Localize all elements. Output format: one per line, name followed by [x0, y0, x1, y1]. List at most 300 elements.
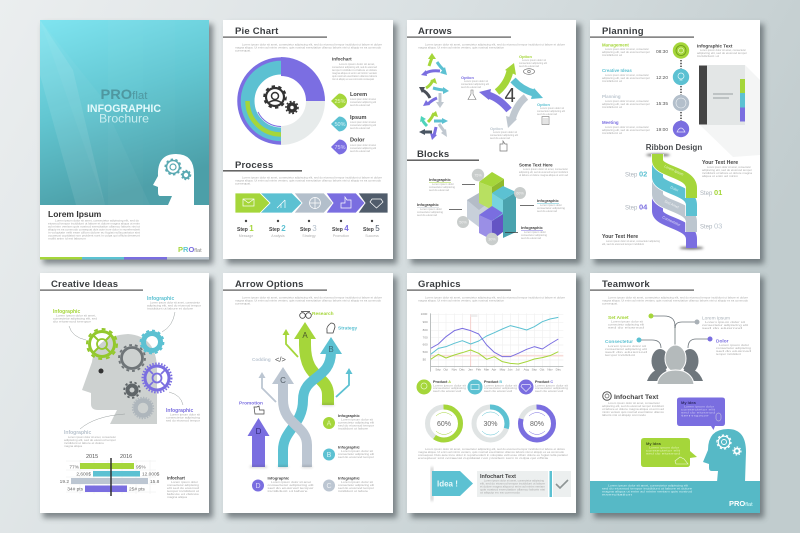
- legend: D: Lorem ipsum dolor sit amet: [271, 480, 311, 484]
- line chart: Sep: [532, 367, 537, 371]
- text block: Lorem ipsum dolor sit amet, consectetur: [608, 401, 660, 405]
- callout: purple Infographic: consectetur adipiscing: [166, 416, 201, 420]
- cover title: INFOGRAPHIC: [87, 103, 161, 115]
- legend: C: Infographic: [338, 476, 361, 480]
- text block: Lorem ipsum dolor sit amet, consectetur adipiscing elit, sed do eiusmod tempor incididunt ut labore et dolore: [425, 447, 565, 451]
- callout: teal Infographic: Lorem ipsum dolor sit amet, consectetur: [150, 300, 200, 304]
- block labels: Lorem ipsum dolor sit amet, consectetur: [523, 167, 568, 171]
- light rays: [40, 20, 175, 205]
- option: left: Lorem ipsum dolor sit: [464, 79, 488, 83]
- legend: 25% Lorem: Lorem ipsum dolor sit amet: [350, 97, 376, 101]
- label: Consectetur: Lorem ipsum dolor sit: [608, 344, 646, 348]
- legend: B: [323, 444, 374, 460]
- line chart: Aug: [524, 367, 529, 371]
- callout: Infographic Text: Infographic Text: [697, 44, 733, 48]
- callout: Infochart: quis nostrud exercitation ullamco laboris: [332, 74, 378, 78]
- label: Consectetur: Consectetur: [605, 339, 633, 345]
- donut 60%: [428, 407, 460, 440]
- product legend B: Product B: [484, 380, 502, 384]
- callout: Infochart Text box: [477, 471, 548, 497]
- label: Lorem Ipsum: [702, 316, 748, 330]
- heading: Process: Process: [235, 160, 273, 171]
- team silhouette: [647, 345, 703, 384]
- schedule rows: Planning: [602, 94, 621, 99]
- block labels: Lorem ipsum dolor: [524, 230, 546, 234]
- product legend C: sed do eiusmod: [535, 389, 564, 393]
- callout: purple Infographic: Infographic: [166, 408, 193, 414]
- line chart: Jul: [516, 367, 520, 371]
- block labels: sed do eiusmod: [417, 213, 437, 217]
- text block: aliquip ex ea commodo consequat duis aute irure dolor in reprehenderit: [48, 228, 140, 232]
- schedule rows: incididunt ut: [602, 79, 622, 83]
- text block: magna aliqua. Ut enim ad minim veniam, quis nostrud exercitation: [418, 298, 504, 302]
- value badges: 60%: [516, 192, 524, 196]
- label: Dolor: Lorem ipsum dolor: [719, 343, 749, 347]
- footer text: [602, 484, 693, 496]
- legend: A: consectetur adipiscing elit: [338, 420, 374, 424]
- icon: head with gears: [153, 154, 194, 205]
- schedule rows: Lorem ipsum dolor sit amet, consectetur: [605, 47, 649, 51]
- legend: B: Infographic: [338, 444, 361, 450]
- legend: A: A: [327, 420, 332, 428]
- text block: laboris nisi ut aliquip commodo: [602, 413, 647, 417]
- panel: planning and ribbon: [590, 20, 760, 259]
- legend: D: consectetur adipiscing elit: [268, 483, 314, 487]
- donut 80%: [520, 407, 554, 440]
- product legend A: Product A: [433, 380, 451, 384]
- block labels: consectetur adipiscing: [521, 233, 547, 237]
- schedule rows: Creative Ideas: [602, 68, 632, 73]
- process steps: Step 3: [300, 224, 317, 233]
- text block: [418, 42, 565, 50]
- speech bubble: purple: consectetur elit: [681, 408, 715, 412]
- ribbon chart: Dolor: [670, 185, 680, 193]
- callout: Infochart: magna aliqua ut enim ad minim veniam: [332, 71, 378, 75]
- gear: green: [87, 329, 117, 359]
- heading: Ribbon Design: Ribbon Design: [646, 143, 702, 152]
- legend: 25% Lorem: 25%: [334, 99, 346, 105]
- heading: Infochart Text: Infochart Text: [614, 394, 659, 401]
- option: top: sed do eiusmod: [519, 64, 539, 68]
- process steps: Strategy: [302, 234, 316, 238]
- ribbon step labels: Step 01: [700, 188, 722, 197]
- callout: purple Infographic: sed do eiusmod tempor: [166, 418, 200, 422]
- arrow D: D: [256, 427, 262, 436]
- callout: Infochart: tempor incididunt ut: [167, 489, 199, 493]
- timeline circles: [673, 42, 689, 137]
- heading: Creative Ideas: Creative Ideas: [51, 279, 118, 290]
- schedule rows: adipiscing elit, sed do eiusmod tempor: [602, 102, 650, 106]
- block labels: sed do eiusmod: [521, 236, 541, 240]
- label: Strategy: [327, 323, 358, 333]
- donut 30%: 30%: [483, 421, 498, 428]
- schedule rows: adipiscing elit, sed do eiusmod tempor: [602, 76, 650, 80]
- legend: B: Lorem ipsum dolor sit: [341, 449, 373, 453]
- label: Research: Research: [312, 311, 334, 317]
- label: Lorem Ipsum: Lorem Ipsum: [702, 316, 730, 322]
- label: Coding: Codding: [252, 357, 271, 362]
- arrow C: C: [280, 376, 286, 385]
- butterfly bar chart: 95%: [136, 464, 146, 470]
- text block: [418, 296, 565, 302]
- speech bubble: green: sed do eiusmod: [646, 452, 681, 456]
- schedule rows: 08:30: [656, 49, 668, 55]
- callout: purple Infographic: [166, 408, 201, 422]
- callout: green Infographic: Lorem ipsum dolor sit amet,: [56, 314, 96, 318]
- product legend A: consectetur adipiscing: [433, 386, 467, 390]
- callout: Your Text Here (top): aliqua ut enim ad minim: [702, 174, 739, 178]
- text block: consequat.: [235, 302, 251, 306]
- text block: consequat.: [235, 48, 251, 52]
- butterfly bar chart: 15.8: [150, 479, 160, 485]
- label: Consectetur: sed do eiusmod: [605, 350, 648, 354]
- text block: consequat. Duis aute irure dolor in reprehenderit in voluptate velit esse cillum dolore eu fugiat nulla pariatur: [418, 453, 568, 457]
- legend: C: Lorem ipsum dolor sit: [341, 480, 373, 484]
- product legend B: [468, 380, 518, 394]
- callout: Infographic Text: incididunt ut: [697, 54, 719, 58]
- text block: Lorem ipsum dolor sit amet, consectetur adipiscing elit, sed do eiusmod tempor incididunt ut labore et dolore: [242, 176, 382, 180]
- value badges: 50%: [459, 220, 467, 224]
- product legend B: sed do eiusmod: [484, 389, 513, 393]
- panel: arrow options: [223, 273, 393, 513]
- label: Research: [300, 311, 334, 318]
- block labels: Infographic: [417, 202, 440, 207]
- legend: D: D: [255, 483, 261, 490]
- callout: Infochart: [167, 476, 200, 499]
- line chart: $0: [423, 358, 426, 362]
- legend: 25% Lorem: consectetur adipiscing elit: [350, 100, 376, 104]
- speech bubble: purple: Lorem ipsum dolor: [684, 404, 714, 408]
- callout: Infochart: elit sed do eiusmod: [167, 486, 200, 490]
- legend: C: incididunt ut labore: [338, 489, 369, 493]
- icon: check box: [550, 471, 571, 497]
- label: Set Amet: [608, 315, 645, 330]
- legend: 25% Lorem: Lorem: [350, 92, 367, 98]
- text block: [418, 447, 568, 460]
- product legend C: [518, 380, 569, 394]
- donut 80%: 80%: [530, 421, 544, 428]
- heading: Arrow Options: Arrow Options: [235, 279, 304, 290]
- product legend C: Lorem ipsum dolor sit: [535, 384, 568, 388]
- cover title: PROflat: [100, 86, 148, 102]
- product legend C: Product C: [535, 380, 553, 384]
- footer text: Lorem ipsum dolor sit amet, consectetur adipiscing elit: [608, 484, 688, 488]
- logo: PROflat: [729, 499, 753, 508]
- block labels: sed do eiusmod: [537, 209, 557, 213]
- product legend A: sed do eiusmod: [433, 389, 462, 393]
- label: Consectetur: [605, 339, 648, 357]
- legend: 75% Dolor: Lorem ipsum dolor sit amet: [350, 143, 376, 147]
- block labels: Lorem ipsum dolor: [540, 203, 562, 207]
- process steps: Analysis: [271, 234, 285, 238]
- speech bubble: green: consectetur elit: [646, 448, 680, 452]
- line chart: Nov: [452, 367, 457, 371]
- panel: cover: [40, 20, 209, 260]
- schedule rows: Management: [602, 42, 629, 48]
- line chart: [421, 312, 563, 372]
- callout: Your Text Here (top): Your Text Here: [702, 160, 738, 166]
- butterfly bar chart: 34# pts: [67, 486, 84, 492]
- callout: teal Infographic: incididunt ut labore et dolore: [147, 306, 194, 310]
- donut 60%: 60%: [437, 421, 451, 428]
- text block: ut labore et dolore magna aliqua ut enim ad: [602, 407, 664, 411]
- option: bottom: Lorem ipsum dolor sit: [493, 130, 517, 134]
- footer text: sed do eiusmod tempor incididunt ut labore et dolore: [602, 486, 693, 490]
- option: top: consectetur adipiscing elit: [519, 61, 547, 65]
- option: bottom: consectetur adipiscing elit: [490, 133, 518, 137]
- option: left: [461, 75, 489, 100]
- icon: gears: [264, 86, 298, 114]
- label: Dolor: consectetur adipiscing: [716, 346, 752, 350]
- option: right: Option: [537, 102, 550, 107]
- arrow B: [283, 337, 342, 467]
- legend: C: sed do eiusmod tempor: [338, 486, 374, 490]
- label: Coding: [252, 355, 286, 364]
- butterfly bar chart: 25# pts: [129, 486, 145, 492]
- callout: Your Text Here (bottom): [602, 234, 660, 246]
- arrow D: [248, 418, 270, 467]
- ribbon step labels: Step 04: [625, 202, 648, 212]
- callout: Your Text Here (top): adipiscing elit, sed do eiusmod tempor: [702, 168, 752, 172]
- head silhouette with gears: [82, 329, 172, 424]
- speech bubble: purple: sed do eiusmod: [681, 410, 716, 414]
- connector marks: [449, 184, 534, 232]
- block labels: consectetur adipiscing: [429, 185, 455, 189]
- legend: A: Lorem ipsum dolor sit: [341, 418, 373, 422]
- line chart: 900: [423, 320, 428, 324]
- footer band: [590, 481, 760, 513]
- callout: grey Infographic: magna aliqua: [64, 444, 82, 448]
- label: Lorem Ipsum: Lorem ipsum dolor sit: [705, 320, 745, 324]
- text block: [602, 296, 748, 306]
- callout: green Infographic: do eiusmod tempor: [53, 320, 91, 324]
- line chart: 600: [423, 343, 428, 347]
- option: bottom: [490, 126, 518, 151]
- product legend B: consectetur adipiscing: [484, 386, 518, 390]
- legend: D: Infographic: [268, 476, 290, 480]
- product legend A: Lorem ipsum dolor sit: [433, 384, 466, 388]
- legend: A: Infographic: [338, 413, 361, 418]
- legend: B: sed do eiusmod tempor: [338, 455, 374, 459]
- callout: Infochart: [332, 56, 378, 81]
- text block: Lorem ipsum dolor sit amet, consectetur adipiscing elit, sed do eiusmod tempor incididunt ut labore et dolore: [242, 296, 382, 300]
- block labels: ut labore et dolore magna aliqua ut enim ad: [519, 173, 568, 177]
- callout: Infochart Text box: quis nostrud exercitation ullamco laboris nisi: [480, 488, 545, 492]
- cover gradient: [40, 20, 209, 205]
- legend: 75% Dolor: [331, 138, 376, 154]
- speech bubble: green: Lorem ipsum dolor: [649, 446, 679, 450]
- butterfly bar chart: 2016: [120, 454, 132, 460]
- schedule rows: Lorem ipsum dolor sit amet, consectetur: [605, 99, 649, 103]
- heading: Infochart Text: [603, 392, 659, 401]
- schedule rows: Lorem ipsum dolor sit amet, consectetur: [605, 73, 649, 77]
- legend: A: incididunt ut labore: [338, 426, 369, 430]
- legend: C: consectetur adipiscing elit: [338, 483, 374, 487]
- legend: D: sed do eiusmod tempor: [268, 486, 314, 490]
- text block: adipiscing elit, sed do eiusmod tempor incididunt: [602, 404, 664, 408]
- process arrows: [235, 193, 388, 213]
- schedule rows: 19:00: [656, 127, 668, 133]
- callout: Infochart: consectetur adipiscing elit, sed do eiusmod: [332, 65, 377, 69]
- option: top: Lorem ipsum dolor sit: [522, 58, 546, 62]
- block labels: Infographic: [521, 225, 544, 230]
- label: Set Amet: consectetur adipiscing elit: [608, 322, 644, 326]
- heading: Blocks: Blocks: [417, 149, 449, 160]
- callout: Infographic Text: adipiscing elit, sed do eiusmod tempor: [697, 51, 747, 55]
- callout: Infochart: Infochart: [167, 476, 186, 480]
- label: Lorem Ipsum: consectetur adipiscing elit: [702, 323, 748, 327]
- connector lines: [636, 314, 712, 348]
- option: bottom: sed do eiusmod: [490, 136, 510, 140]
- text block: Lorem ipsum dolor sit amet, consectetur adipiscing elit, sed do eiusmod tempor incididunt ut labore et dolore: [242, 42, 382, 46]
- ribbon chart: Consectetur: [662, 215, 682, 227]
- label: Dolor: tempor incididunt: [716, 352, 741, 356]
- text block: mollit anim id est laborum: [48, 236, 87, 240]
- text block: Lorem ipsum dolor sit amet, consectetur adipiscing elit, sed do: [55, 218, 139, 222]
- process steps: Step 2: [269, 224, 286, 233]
- block labels: consectetur adipiscing: [417, 210, 443, 214]
- text block: Lorem ipsum dolor sit amet, consectetur adipiscing elit, sed do eiusmod tempor incididunt ut labore et dolore: [425, 296, 565, 300]
- process icons: [243, 197, 383, 208]
- product legend B: Lorem ipsum dolor sit: [484, 384, 517, 388]
- process steps: Step 5: [363, 224, 380, 233]
- label: Set Amet: Set Amet: [608, 315, 629, 321]
- legend: 25% Lorem: sed do eiusmod: [350, 103, 370, 107]
- ribbon chart: [646, 154, 704, 249]
- heading: Planning: Planning: [602, 26, 644, 37]
- footer text: exercitation: [602, 492, 633, 496]
- butterfly bar chart: 2,600$: [76, 472, 91, 478]
- speech bubble: purple: tempor: [681, 414, 709, 418]
- butterfly bar chart: [60, 454, 160, 496]
- text block: in voluptate velit esse cillum dolore eu fugiat nulla pariatur sint: [48, 230, 140, 234]
- block labels: Some Text Here: [519, 162, 553, 168]
- line chart: 700: [423, 335, 428, 339]
- donut 30%: [474, 407, 507, 440]
- option: left: Option: [461, 75, 474, 80]
- gear: light: [132, 398, 154, 418]
- value badges: [457, 169, 526, 245]
- speech bubble: purple: My Idea: [681, 400, 696, 405]
- ribbon step labels: Step 02: [625, 170, 647, 178]
- legend: D: incididunt ut labore: [268, 489, 308, 493]
- butterfly bar chart: 77%: [69, 464, 80, 470]
- process steps: Step 4: [332, 224, 349, 233]
- block labels: consectetur adipiscing: [537, 206, 565, 210]
- text block: consequat.: [235, 182, 251, 186]
- text block: ad minim veniam quis nostrud exercitation ullamco laboris nisi ut: [48, 224, 140, 228]
- schedule rows: 15:35: [656, 101, 668, 107]
- small arrow triad 3: [419, 111, 448, 140]
- line chart: Nov: [547, 367, 553, 371]
- text block: consequat.: [602, 302, 618, 306]
- small arrow triad 2: [419, 78, 449, 108]
- legend: A: [323, 413, 374, 430]
- panel: graphics: [407, 273, 576, 513]
- legend: 75% Dolor: consectetur adipiscing elit: [350, 146, 376, 150]
- arrow A: A: [302, 331, 308, 340]
- thin side arrows: [258, 329, 352, 402]
- callout: Your Text Here (top): [702, 160, 752, 178]
- gear: purple: [142, 364, 172, 392]
- value badges: 75%: [474, 174, 482, 178]
- callout: grey Infographic: Lorem ipsum dolor sit amet, consectetur: [68, 435, 116, 439]
- callout: Your Text Here (bottom): elit, sed do eiusmod tempor incididunt: [602, 242, 644, 246]
- callout: green Infographic: Infographic: [53, 309, 80, 315]
- process steps: [237, 220, 380, 238]
- block labels: [417, 162, 568, 240]
- gear: teal: [140, 330, 164, 354]
- text block: magna aliqua. Ut enim ad minim veniam, quis nostrud exercitation ullamco laboris nisi ut aliquip ex ea commodo: [418, 450, 564, 454]
- callout: Infographic Text: [697, 44, 747, 58]
- line chart: Feb: [476, 367, 481, 371]
- legend: C: [323, 476, 374, 493]
- gear: grey: [119, 345, 145, 371]
- block labels: adipiscing elit, sed do eiusmod tempor incididunt: [519, 170, 568, 174]
- arrow A: [294, 322, 328, 405]
- heading: Lorem Ipsum: Lorem Ipsum: [48, 209, 102, 219]
- line chart: Oct: [443, 367, 448, 371]
- callout: Infochart: tempor incididunt ut labore et dolore: [332, 68, 377, 72]
- legend: 50% Ipsum: [331, 115, 376, 132]
- speech bubble: green: [641, 438, 697, 467]
- schedule rows: adipiscing elit, sed do eiusmod tempor: [602, 128, 650, 132]
- callout: Infochart Text box: elit, sed do eiusmod tempor incididunt ut labore: [480, 482, 545, 486]
- callout: green Infographic: consectetur adipiscing elit, sed: [53, 316, 98, 320]
- callout: Your Text Here (top): Lorem ipsum dolor sit amet, consectetur: [707, 165, 751, 169]
- text block: magna aliqua. Ut enim ad minim veniam, quis nostrud exercitation: [418, 46, 504, 50]
- text block: magna aliqua. Ut enim ad minim veniam, quis nostrud exercitation ullamco laboris nisi ut aliquip ex ea commodo: [235, 178, 381, 182]
- block labels: Lorem ipsum dolor: [420, 207, 442, 211]
- option: right: [537, 102, 565, 124]
- line chart: May: [500, 367, 506, 371]
- schedule rows: Meeting: [602, 120, 619, 125]
- ribbon chart: Lorem ipsum: [664, 164, 684, 177]
- line chart: 800: [423, 328, 428, 332]
- option: top: [519, 54, 547, 74]
- text block: excepteur sint occaecat cupidatat non proident sunt in culpa qui officia: [418, 456, 549, 460]
- callout: teal Infographic: Infographic: [147, 296, 174, 302]
- callout connectors: [69, 312, 183, 429]
- heading: Arrows: Arrows: [418, 26, 452, 37]
- text block: [602, 401, 664, 417]
- heading: Pie Chart: Pie Chart: [235, 26, 279, 37]
- legend: 75% Dolor: 75%: [334, 145, 346, 151]
- schedule rows: adipiscing elit, sed do eiusmod tempor: [602, 50, 650, 54]
- callout: Idea: Idea !: [437, 480, 458, 488]
- callout: Infochart Text box: Lorem ipsum dolor sit amet, consectetur adipiscing: [484, 478, 544, 482]
- text block: [48, 218, 141, 240]
- arrow base shadows: [250, 404, 334, 468]
- line chart: Oct: [540, 367, 544, 371]
- process steps: Promotion: [333, 234, 349, 238]
- value badges: 30%: [488, 238, 496, 242]
- panel: arrows and blocks: [407, 20, 576, 259]
- butterfly bar chart: 19.2: [60, 479, 69, 485]
- callout: Infochart: consectetur adipiscing: [167, 483, 199, 487]
- speech bubble: purple: [677, 398, 725, 430]
- legend: C: C: [326, 483, 332, 490]
- text block: [235, 42, 382, 52]
- block labels: sed do eiusmod: [429, 188, 449, 192]
- schedule rows: incididunt ut: [602, 53, 622, 57]
- logo: PROflat: [178, 245, 202, 254]
- colour strip: [40, 257, 209, 260]
- panel: creative ideas: [40, 273, 209, 513]
- option: bottom: Option: [490, 126, 503, 131]
- label: Dolor: sed do eiusmod: [716, 349, 752, 353]
- callout: Infochart: Lorem ipsum dolor: [171, 480, 198, 484]
